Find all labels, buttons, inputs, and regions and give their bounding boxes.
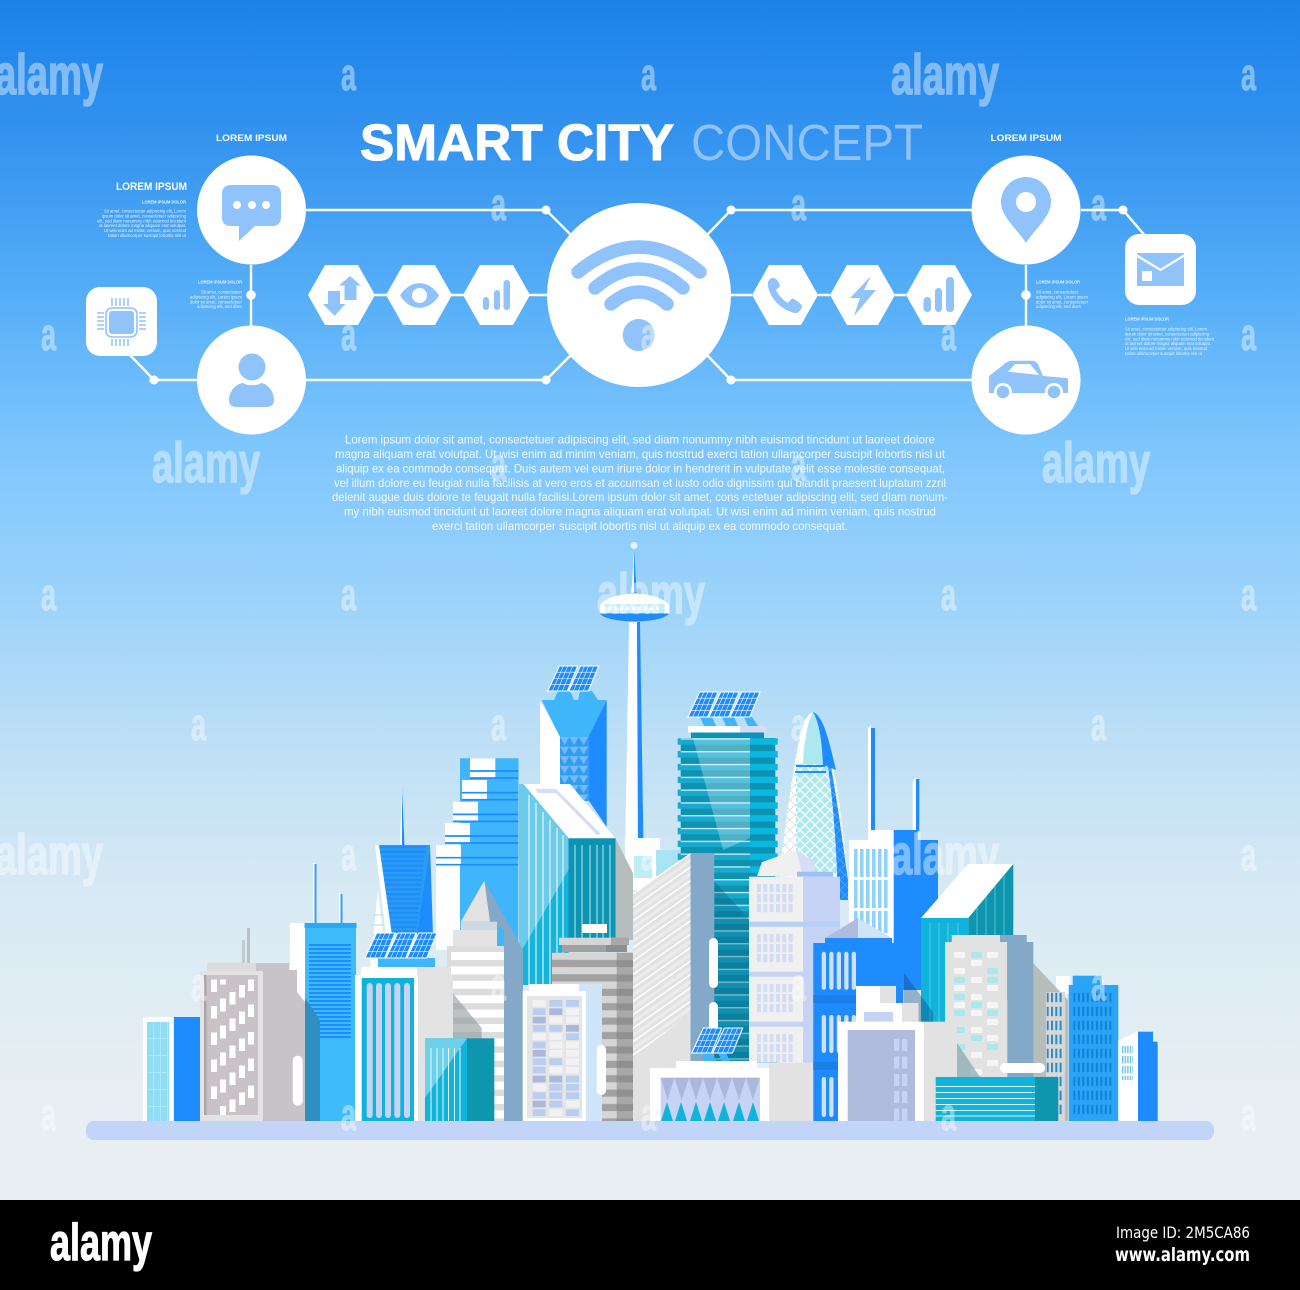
icon: car circle — [972, 326, 1080, 434]
watermark: alamy stock overlay: a — [41, 1089, 57, 1140]
building: tall white back right — [849, 725, 894, 940]
building: observation tower — [600, 542, 669, 860]
title: Smart City Concept — [360, 114, 923, 171]
ground platform — [86, 1121, 1214, 1140]
building: large grey slant striped tower — [633, 853, 718, 1121]
watermark: alamy stock overlay: alamy — [152, 431, 260, 495]
text block: far right note: tation ullamcorper suscipit lobortis nisl ut — [1125, 351, 1203, 356]
label: top left heading: LOREM IPSUM — [216, 133, 287, 144]
watermark: alamy stock overlay: a — [941, 569, 957, 620]
watermark: alamy stock overlay: a — [341, 49, 357, 100]
watermark: alamy stock overlay: a — [191, 699, 207, 750]
building: blue tower with pyramid roof — [813, 918, 903, 1121]
text block: far right note: elit, sed diam nonummy nibh euismod tincidunt — [1125, 336, 1215, 341]
body paragraph: vel illum dolore eu feugiat nulla facilisis at vero eros et accumsan et iusto odio dignissim qui blandit praesent luptatum zzril — [334, 477, 946, 490]
building: front white stepped block — [838, 986, 957, 1121]
text block: upper left note: LOREM IPSUM DOLOR — [142, 199, 186, 204]
icon: user circle — [197, 326, 306, 434]
watermark: alamy stock overlay: a — [791, 179, 807, 230]
icon: eye hexagon — [386, 265, 452, 325]
watermark: alamy stock overlay: a — [491, 699, 507, 750]
body paragraph: magna aliquam erat volutpat. Ut wisi enim ad minim veniam, quis nostrud exerci tation ullamcorper suscipit lobortis nisl ut — [335, 448, 946, 461]
watermark: alamy stock overlay: a — [791, 699, 807, 750]
icon: up and down arrows hexagon — [308, 265, 375, 325]
text block: middle right note: dolor sit amet, consectetuer — [1036, 299, 1089, 304]
building: grey brick tower with white windows — [200, 928, 305, 1121]
text block: upper left note: elit, sed diam nonummy nibh euismod tincidunt — [97, 218, 187, 223]
body paragraph: delenit augue duis dolore te feugait nulla facilisi.Lorem ipsum dolor sit amet, cons ectetuer adipiscing elit, sed diam nonum- — [332, 491, 948, 504]
watermark: alamy stock overlay: alamy — [891, 823, 999, 887]
watermark: alamy stock overlay: a — [1241, 1089, 1257, 1140]
watermark: alamy stock overlay: a — [341, 569, 357, 620]
text block: middle left note: adipiscing elit, sed diam — [197, 304, 243, 309]
watermark: alamy stock overlay: a — [641, 309, 657, 360]
text block: middle right note: Sit amet, consectetuer — [1036, 290, 1079, 294]
watermark: alamy stock overlay: a — [491, 179, 507, 230]
watermark: alamy stock overlay: a — [1241, 829, 1257, 880]
building: blue antenna tower — [290, 863, 356, 1121]
building: glass tower with white roof — [519, 784, 633, 985]
title: Smart City Concept: SMART CITY — [360, 114, 674, 171]
footer image id: Image ID: 2M5CA86 — [1116, 1223, 1250, 1242]
building: front low block with triangles — [650, 1028, 813, 1121]
network connector lines — [128, 206, 1147, 384]
icon: phone hexagon — [752, 265, 818, 325]
text block: upper left note: ut laoreet dolore magna aliquam erat volutpat. — [99, 223, 186, 228]
building: low teal box left — [425, 1038, 494, 1121]
building: gherkin tower — [781, 712, 850, 900]
icon: lightning hexagon — [830, 265, 895, 325]
body paragraph — [332, 434, 948, 533]
watermark: alamy stock overlay: a — [41, 309, 57, 360]
watermark: alamy stock overlay: a — [641, 829, 657, 880]
text block: middle right note: adipiscing elit, sed diam — [1036, 304, 1082, 309]
text block: far right note: ut laoreet dolore magna aliquam erat volutpat. — [1125, 341, 1211, 346]
text block: upper left note: Ut wisi enim ad minim veniam, quis nostrud — [104, 228, 187, 233]
building: rooftop blocks with teal columns — [355, 933, 453, 1121]
text block: upper left note: LOREM IPSUM — [116, 181, 187, 193]
text block: upper left note — [97, 181, 187, 238]
building: pyramid top white tower — [447, 881, 523, 1121]
footer website: www.alamy.com — [1115, 1244, 1250, 1266]
text block: far right note — [1125, 316, 1215, 356]
watermark: alamy stock overlay: a — [1091, 959, 1107, 1010]
watermark: alamy stock overlay: a — [341, 829, 357, 880]
watermark: alamy stock overlay: a — [491, 439, 507, 490]
text block: upper left note: tation ullamcorper suscipit lobortis nisl ut — [108, 233, 187, 238]
watermark: alamy stock overlay: alamy — [891, 43, 999, 107]
label: top right heading: LOREM IPSUM — [990, 133, 1062, 144]
text block: far right note: Sit amet, consectetuer adipiscing elit, Lorem — [1125, 326, 1208, 332]
watermark: alamy stock overlay: a — [1091, 179, 1107, 230]
building: slanted blue tower with antenna — [370, 788, 435, 967]
watermark: alamy stock overlay: a — [1241, 309, 1257, 360]
watermark: alamy stock overlay: a — [1091, 699, 1107, 750]
text block: middle left note — [190, 280, 243, 309]
watermark: alamy stock overlay: a — [641, 1089, 657, 1140]
watermark: alamy stock overlay: alamy — [1042, 431, 1150, 495]
building: small background blocks — [625, 838, 683, 890]
text block: middle left note: LOREM IPSUM DOLOR — [198, 280, 242, 284]
text block: far right note: LOREM IPSUM DOLOR — [1125, 316, 1169, 322]
watermark: alamy stock overlay: a — [791, 439, 807, 490]
text block: far right note: ipsum dolor sit amet, consectetuer adipiscing — [1125, 331, 1210, 336]
watermark: alamy stock overlay: a — [491, 959, 507, 1010]
icon: mail tile — [1125, 234, 1196, 305]
text block: middle right note — [1036, 280, 1089, 309]
text block: middle left note: Sit amet, consectetuer — [201, 290, 243, 294]
watermark: alamy stock overlay: a — [1241, 569, 1257, 620]
icon: location pin circle — [972, 156, 1080, 264]
city skyline illustration — [143, 542, 1158, 1121]
watermark: alamy stock overlay: a — [941, 1089, 957, 1140]
text block: middle left note: dolor sit amet, consectetuer — [190, 299, 243, 304]
body paragraph: Lorem ipsum dolor sit amet, consectetuer adipiscing elit, sed diam nonummy nibh euismod tincidunt ut laoreet dolore — [345, 434, 935, 446]
building: teal floors tower — [678, 692, 778, 1063]
body paragraph: exerci tation ullamcorper suscipit lobortis nisl ut aliquip ex ea commodo consequat. — [432, 520, 848, 533]
text block: upper left note: ipsum dolor sit amet, consectetuer adipiscing — [102, 213, 187, 218]
buildings: far left pair — [143, 1017, 200, 1121]
building: white tiered tower with lavender windows — [749, 850, 840, 1064]
watermark: alamy stock overlay: a — [941, 309, 957, 360]
icon: wifi hub — [547, 203, 731, 387]
watermark: alamy stock overlay: alamy — [597, 562, 705, 626]
text block: middle left note: adipiscing elit, Lorem ipsum — [190, 294, 243, 299]
text block: middle right note: LOREM IPSUM DOLOR — [1036, 280, 1080, 284]
buildings: far right pair — [1118, 1031, 1158, 1121]
building: right blue tower — [1069, 976, 1118, 1121]
text block: far right note: Ut wisi enim ad minim veniam, quis nostrud — [1125, 346, 1208, 351]
building: grey tower with aqua windows — [945, 935, 1033, 1078]
building: right grey tower with blue windows — [1033, 963, 1070, 1121]
watermark: alamy stock overlay: a — [1241, 49, 1257, 100]
text block: middle right note: adipiscing elit, Lorem ipsum — [1036, 294, 1089, 299]
watermark: alamy stock overlay: a — [791, 959, 807, 1010]
icon: signal bars hexagon left — [463, 265, 530, 325]
text block: upper left note: Sit amet, consectetuer adipiscing elit, Lorem — [104, 208, 187, 214]
title: Smart City Concept: CONCEPT — [691, 114, 923, 171]
watermark: alamy stock overlay: a — [41, 569, 57, 620]
body paragraph: aliquip ex ea commodo consequat. Duis autem vel eum iriure dolor in hendrerit in vulputate velit esse molestie consequat, — [336, 462, 945, 475]
building: low teal box right — [936, 1063, 1058, 1121]
building: solar roof tower — [540, 666, 607, 827]
building: blue back right — [894, 777, 938, 990]
watermark: alamy stock overlay: a — [341, 1089, 357, 1140]
building: stepped blue tower — [436, 758, 522, 963]
building: lavender window tower — [523, 984, 606, 1121]
watermark: alamy stock overlay: a — [191, 959, 207, 1010]
footer alamy logo: alamy — [50, 1214, 152, 1272]
icon: microchip tile — [86, 287, 157, 356]
footer black bar — [0, 1200, 1300, 1290]
building: teal corner with white roof — [904, 864, 1013, 1022]
icon: chat bubble circle — [197, 156, 306, 264]
watermark: alamy stock overlay: a — [341, 309, 357, 360]
watermark: alamy stock overlay: a — [641, 49, 657, 100]
body paragraph: my nibh euismod tincidunt ut laoreet dolore magna aliquam erat volutpat. Ut wisi enim ad minim veniam, quis nostrud — [344, 506, 936, 519]
icon: signal bars hexagon right — [906, 265, 972, 325]
building: grey stacked tower — [552, 938, 633, 1121]
